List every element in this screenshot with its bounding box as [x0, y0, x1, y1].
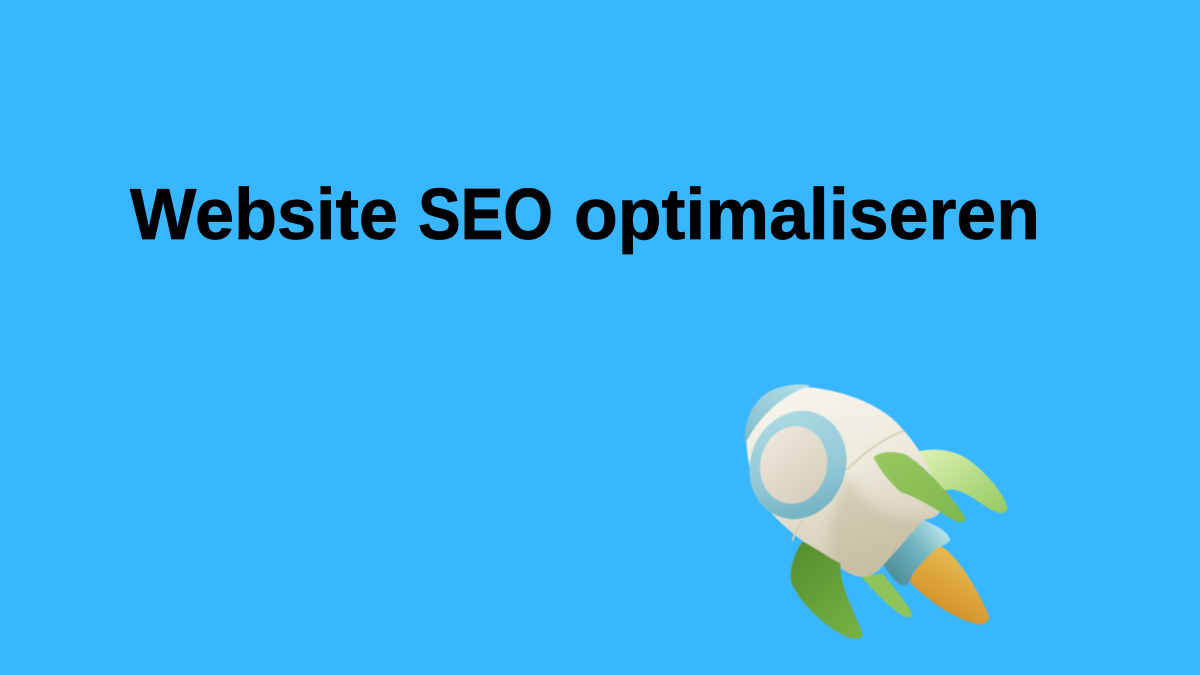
porthole window: [753, 420, 834, 510]
back lower fin: [862, 573, 912, 617]
front lower fin: [791, 541, 863, 639]
rocket collar: [883, 519, 950, 586]
back right fin: [917, 450, 1007, 513]
body seams: [793, 431, 904, 541]
title: Website: [130, 175, 398, 255]
title: [130, 175, 1040, 255]
icon: rocket: [734, 384, 1007, 639]
title: SEO: [418, 175, 553, 255]
rocket flame: [909, 545, 989, 624]
rocket body: [747, 387, 940, 577]
body shading: [828, 479, 923, 575]
rocket nose: [745, 384, 811, 444]
front right fin: [873, 452, 966, 522]
porthole ring: [734, 397, 862, 533]
banner: [130, 186, 1036, 640]
title: optimaliseren: [574, 175, 1040, 255]
